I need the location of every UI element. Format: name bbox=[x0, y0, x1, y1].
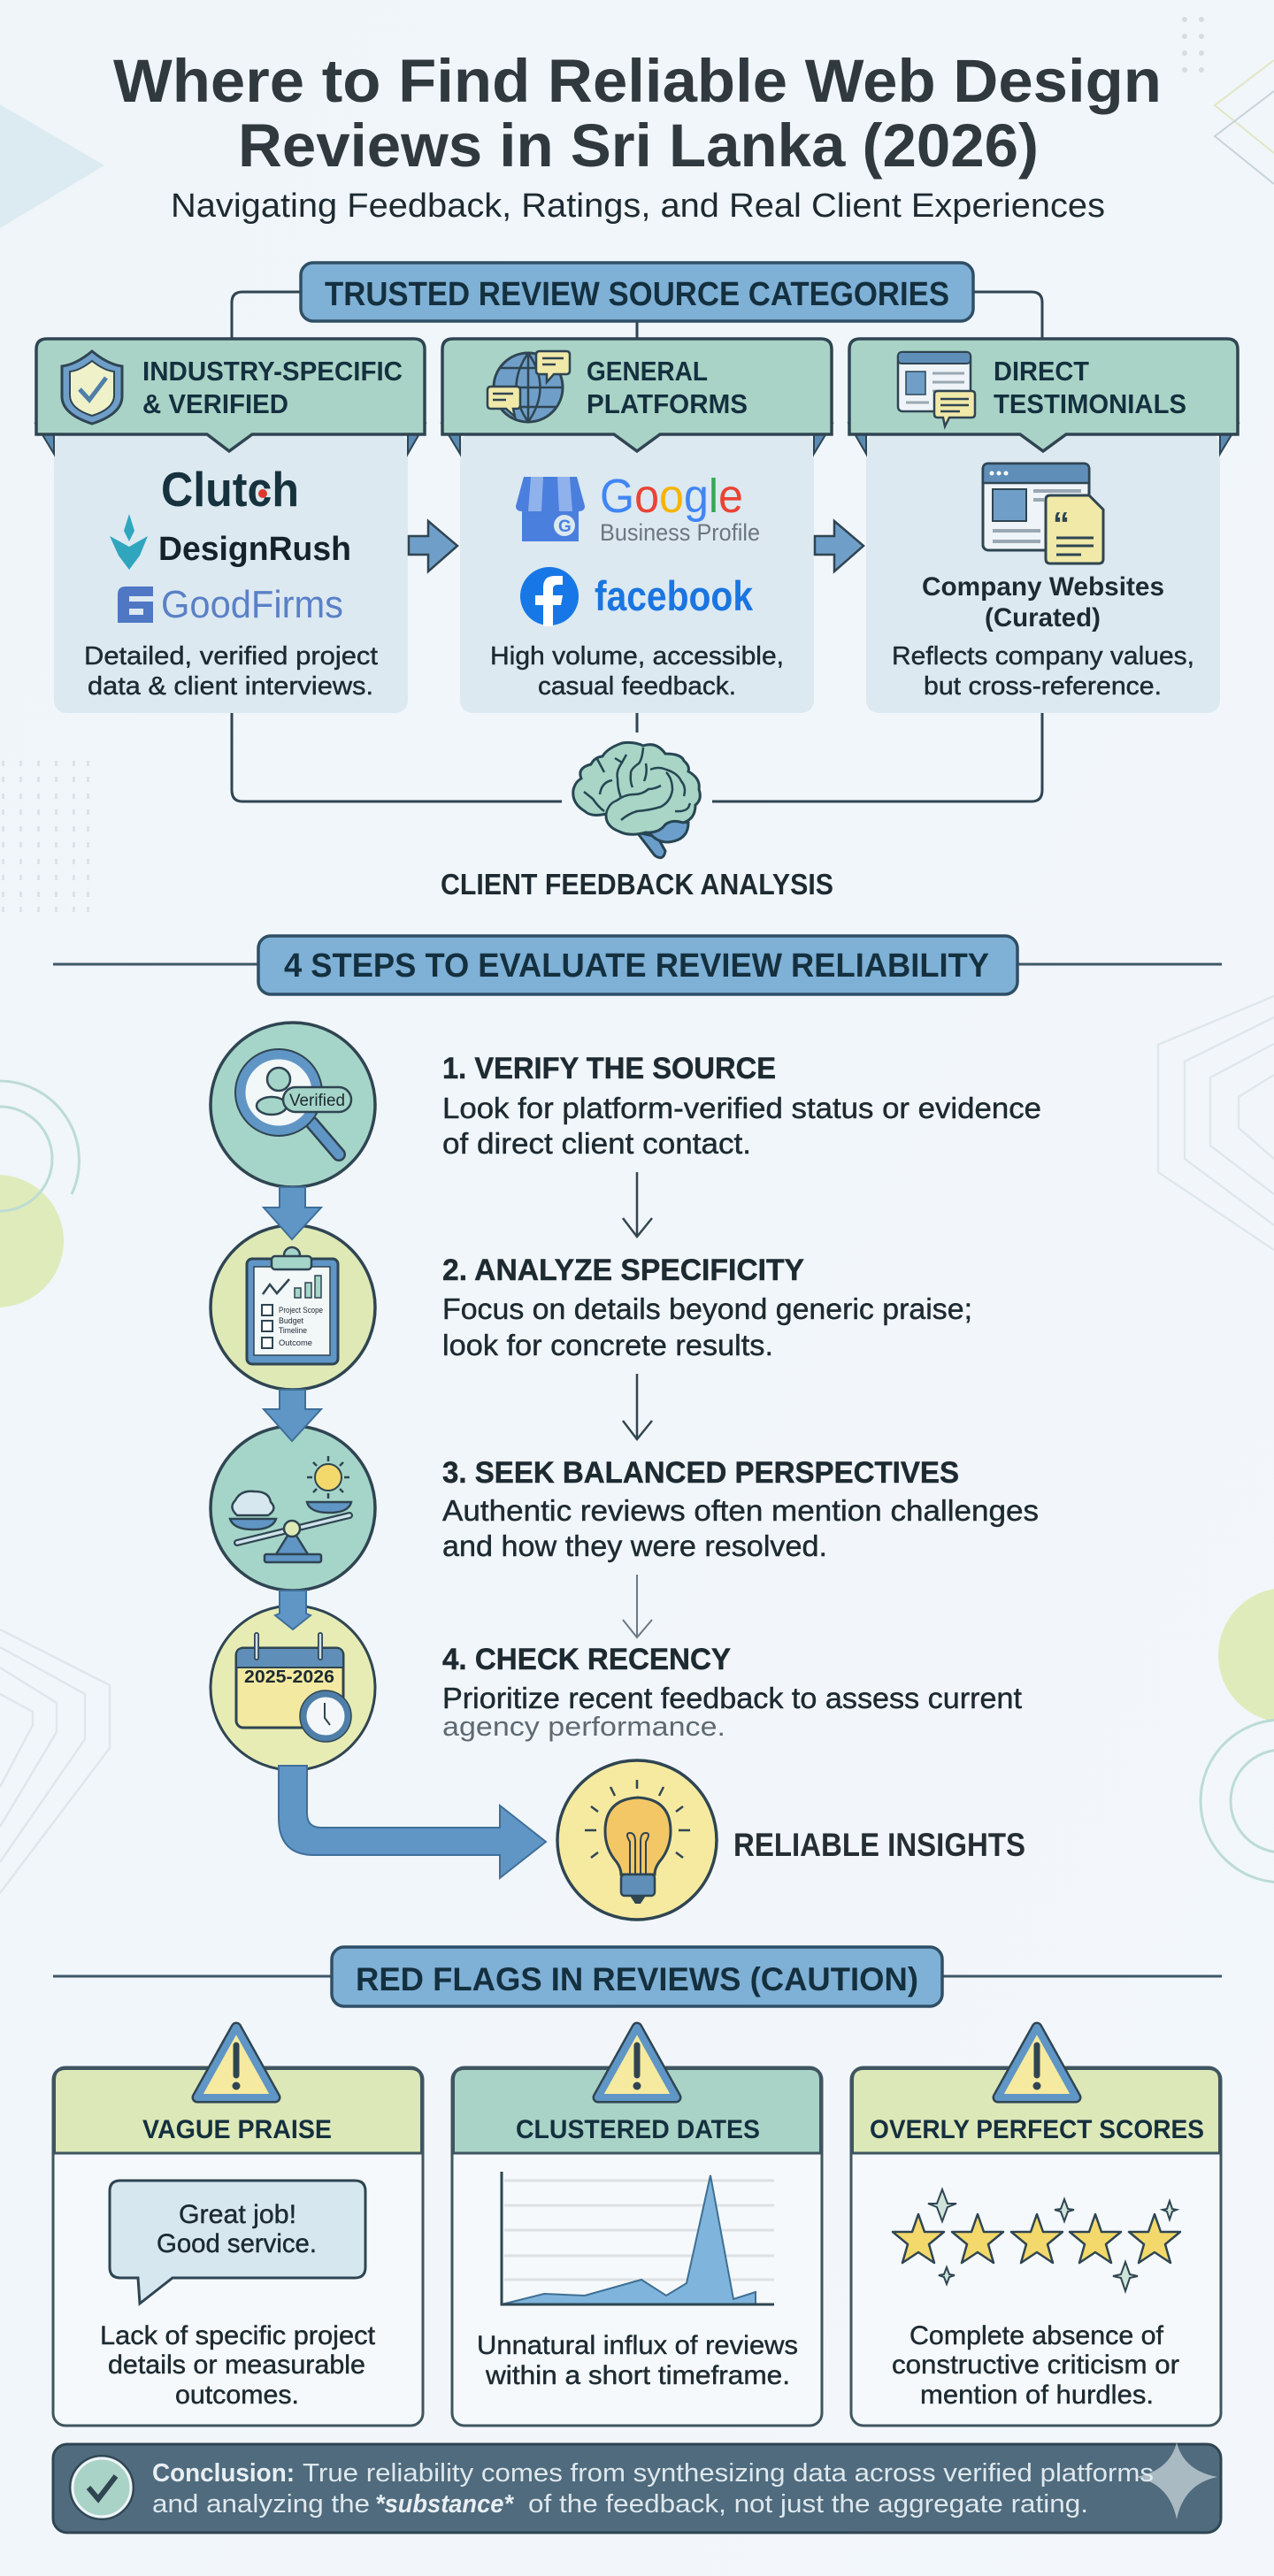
conclusion text bbox=[152, 2459, 1154, 2518]
ribbon label bbox=[142, 356, 403, 419]
logo: GoodFirms: GoodFirms bbox=[161, 583, 343, 626]
description: High volume, accessible, bbox=[490, 642, 784, 671]
step 4 text bbox=[442, 1643, 1022, 1742]
step 2 text bbox=[442, 1254, 972, 1361]
connectors to brain bbox=[232, 713, 1042, 801]
category ribbon bbox=[849, 339, 1238, 451]
card heading: OVERLY PERFECT SCORES bbox=[870, 2115, 1204, 2144]
icon: website with quote document: “ bbox=[1053, 506, 1070, 543]
icon: lightbulb bbox=[557, 1760, 717, 1920]
logo: Google Business Profile: Business Profile bbox=[600, 519, 760, 546]
icon: website with quote document bbox=[983, 464, 1103, 564]
area chart: review spike bbox=[502, 2172, 774, 2304]
icon: warning triangle bbox=[998, 2028, 1076, 2097]
step 1 text: Look for platform-verified status or evidence bbox=[442, 1092, 1041, 1124]
sparkles bbox=[928, 2189, 1177, 2291]
description bbox=[490, 642, 784, 701]
step 3 icon: balance scale bbox=[211, 1426, 375, 1591]
heading: 4 steps bbox=[258, 936, 1017, 994]
category ribbon bbox=[442, 339, 832, 451]
icon: warning triangle bbox=[598, 2028, 676, 2097]
step 3 text: Authentic reviews often mention challenges bbox=[442, 1494, 1039, 1527]
icon: globe with speech bubbles bbox=[487, 351, 570, 422]
icon: browser with testimonial bbox=[898, 352, 975, 426]
description: details or measurable bbox=[108, 2350, 365, 2380]
step 4 text: Prioritize recent feedback to assess current bbox=[442, 1682, 1022, 1714]
step 2 icon: clipboard bbox=[211, 1225, 375, 1390]
description bbox=[100, 2321, 376, 2410]
section rule bbox=[53, 1974, 1222, 1978]
ribbon label: DIRECT bbox=[994, 356, 1089, 387]
ribbon label bbox=[994, 356, 1186, 419]
step 2 text: Focus on details beyond generic praise; bbox=[442, 1292, 972, 1325]
description bbox=[892, 642, 1194, 701]
arrow: step 2 to step 3 text bbox=[623, 1374, 652, 1439]
description: data & client interviews. bbox=[88, 672, 373, 701]
connectors from source heading to categories bbox=[232, 292, 1042, 340]
speech bubble bbox=[110, 2181, 365, 2304]
panel: vague praise bbox=[53, 2028, 423, 2426]
description: Unnatural influx of reviews bbox=[477, 2331, 798, 2360]
ribbon label: GENERAL bbox=[587, 356, 708, 387]
description: Detailed, verified project bbox=[84, 642, 378, 671]
source label: Company Websites bbox=[922, 572, 1164, 602]
conclusion text: and analyzing the bbox=[152, 2490, 370, 2518]
background decorations bbox=[0, 17, 1274, 1893]
logo: DesignRush: DesignRush bbox=[158, 531, 351, 568]
logo: Google Business Profile bbox=[516, 470, 760, 546]
step 2 icon: clipboard: Outcome bbox=[279, 1338, 312, 1347]
description bbox=[84, 642, 378, 701]
sparkle mark bbox=[1136, 2442, 1217, 2519]
logo: Google Business Profile: G bbox=[558, 518, 572, 536]
description: mention of hurdles. bbox=[920, 2380, 1154, 2410]
panel: direct testimonials bbox=[849, 339, 1238, 713]
category ribbon bbox=[36, 339, 425, 451]
speech bubble: Great job! bbox=[179, 2200, 296, 2229]
step 3 text bbox=[442, 1456, 1039, 1562]
ribbon label bbox=[587, 356, 748, 419]
step 2 text: look for concrete results. bbox=[442, 1329, 773, 1361]
heading: 4 steps: 4 STEPS TO EVALUATE REVIEW RELIABILITY bbox=[284, 947, 989, 985]
logo: Clutch: Clutch bbox=[161, 462, 299, 517]
step 2 icon: clipboard: Timeline bbox=[279, 1326, 307, 1335]
icon: brain bbox=[573, 742, 700, 858]
title: Reviews in Sri Lanka (2026) bbox=[238, 111, 1039, 180]
panel: general platforms bbox=[442, 339, 832, 713]
card heading: VAGUE PRAISE bbox=[142, 2115, 332, 2144]
description: constructive criticism or bbox=[892, 2350, 1179, 2380]
step 2 icon: clipboard: Budget bbox=[279, 1316, 303, 1325]
conclusion text: True reliability comes from synthesizing data across verified platforms bbox=[303, 2459, 1154, 2488]
step 4 text: agency performance. bbox=[442, 1711, 725, 1742]
description bbox=[892, 2321, 1179, 2410]
conclusion text: Conclusion: bbox=[152, 2459, 295, 2488]
source label: (Curated) bbox=[985, 603, 1101, 632]
logo: Facebook bbox=[520, 567, 754, 626]
description: outcomes. bbox=[175, 2380, 299, 2410]
section rule bbox=[53, 962, 1222, 966]
label: reliable insights: RELIABLE INSIGHTS bbox=[733, 1827, 1025, 1863]
logo: Google Business Profile: Google bbox=[600, 470, 743, 523]
step 3 text: 3. SEEK BALANCED PERSPECTIVES bbox=[442, 1456, 959, 1490]
five stars bbox=[893, 2214, 1180, 2263]
step 1 icon: verified magnifier bbox=[211, 1023, 375, 1187]
arrow: step 3 to step 4 text bbox=[623, 1575, 652, 1637]
icon: shield bbox=[62, 351, 122, 424]
step 4 text: 4. CHECK RECENCY bbox=[442, 1643, 731, 1676]
step 4 icon: calendar and clock bbox=[211, 1606, 375, 1770]
arrow: step 4 to reliable insights bbox=[279, 1766, 546, 1878]
card heading: CLUSTERED DATES bbox=[516, 2115, 760, 2144]
step 1 text: 1. VERIFY THE SOURCE bbox=[442, 1052, 776, 1085]
step 3 text: and how they were resolved. bbox=[442, 1530, 827, 1562]
ribbon label: & VERIFIED bbox=[142, 388, 288, 419]
logo: Facebook: facebook bbox=[595, 572, 754, 619]
heading: red flags bbox=[332, 1947, 942, 2006]
step 1 icon: verified magnifier: Verified bbox=[289, 1092, 345, 1110]
arrow: industry to general bbox=[409, 521, 457, 571]
step 1 text bbox=[442, 1052, 1041, 1160]
arrow: step 1 to step 2 text bbox=[623, 1172, 652, 1237]
description: casual feedback. bbox=[538, 672, 736, 701]
subtitle: Navigating Feedback, Ratings, and Real Client Experiences bbox=[171, 188, 1105, 225]
ribbon label: PLATFORMS bbox=[587, 388, 748, 419]
title bbox=[113, 47, 1162, 180]
description: but cross-reference. bbox=[924, 672, 1162, 701]
ribbon label: TESTIMONIALS bbox=[994, 388, 1186, 419]
title: Where to Find Reliable Web Design bbox=[113, 47, 1162, 115]
panel: overly perfect scores bbox=[851, 2028, 1221, 2426]
step 1 text: of direct client contact. bbox=[442, 1127, 751, 1160]
panel: industry-specific and verified bbox=[36, 339, 425, 713]
conclusion text: *substance* bbox=[375, 2490, 515, 2518]
step arrow 1 to 2 bbox=[264, 1187, 321, 1239]
conclusion text: of the feedback, not just the aggregate rating. bbox=[528, 2490, 1088, 2518]
panel: conclusion bbox=[53, 2442, 1221, 2533]
step 2 text: 2. ANALYZE SPECIFICITY bbox=[442, 1254, 804, 1287]
description: Reflects company values, bbox=[892, 642, 1194, 671]
step 4 icon: calendar and clock: 2025-2026 bbox=[244, 1668, 334, 1687]
step 2 icon: clipboard: Project Scope bbox=[279, 1306, 323, 1315]
icon: check badge bbox=[70, 2456, 134, 2519]
description bbox=[477, 2331, 798, 2390]
source label bbox=[922, 572, 1164, 632]
panel: clustered dates bbox=[452, 2028, 822, 2426]
ribbon label: INDUSTRY-SPECIFIC bbox=[142, 356, 403, 387]
step arrow 3 to 4 bbox=[275, 1591, 311, 1629]
description: within a short timeframe. bbox=[485, 2361, 790, 2390]
label: client feedback analysis: CLIENT FEEDBACK ANALYSIS bbox=[441, 868, 833, 901]
logo: DesignRush bbox=[110, 514, 351, 570]
speech bubble: Good service. bbox=[157, 2229, 317, 2258]
heading: trusted review source categories bbox=[301, 263, 973, 321]
icon: warning triangle bbox=[197, 2028, 275, 2097]
description: Complete absence of bbox=[909, 2321, 1164, 2350]
arrow: general to direct bbox=[815, 521, 863, 571]
step arrow 2 to 3 bbox=[264, 1390, 321, 1441]
heading: red flags: RED FLAGS IN REVIEWS (CAUTION) bbox=[356, 1961, 918, 1997]
description: Lack of specific project bbox=[100, 2321, 376, 2350]
heading: trusted review source categories: TRUSTED REVIEW SOURCE CATEGORIES bbox=[325, 276, 949, 313]
